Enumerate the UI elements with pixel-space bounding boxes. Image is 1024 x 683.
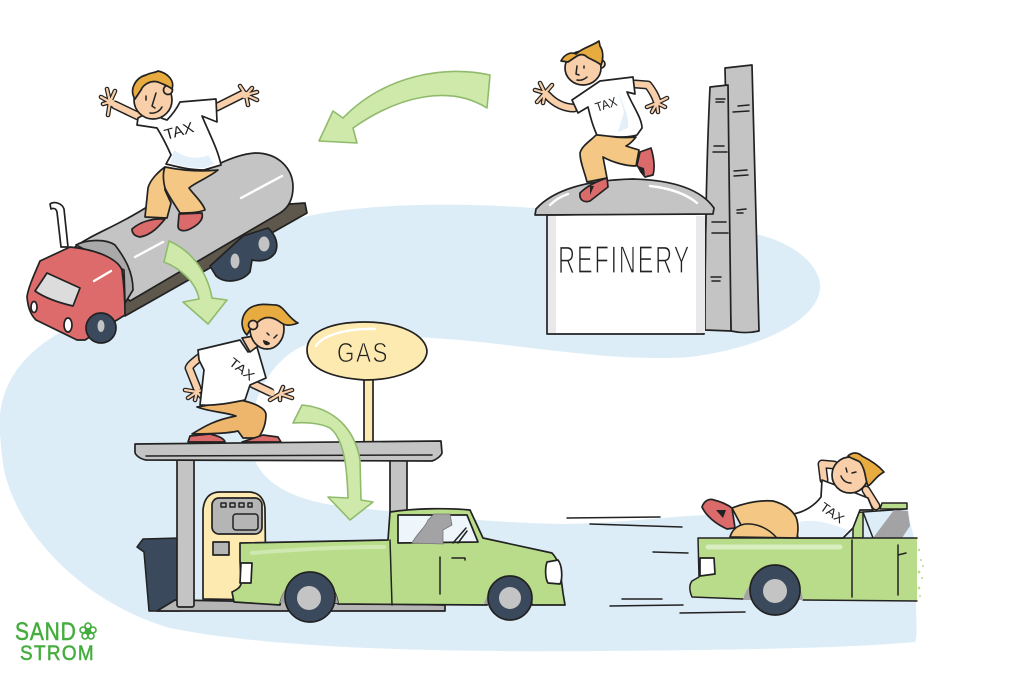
tax label: TAX bbox=[817, 499, 847, 527]
head light bbox=[546, 560, 562, 584]
pants bbox=[192, 400, 266, 438]
shoes bbox=[580, 148, 654, 202]
truck details bbox=[390, 540, 465, 605]
pants bbox=[580, 133, 639, 182]
headlights bbox=[31, 302, 72, 332]
hair bbox=[133, 71, 173, 99]
head bbox=[134, 81, 172, 119]
arrow: refinery to truck bbox=[319, 71, 490, 143]
step 4: driving pickup with tax figure bbox=[567, 453, 924, 615]
refinery label: REFINERY bbox=[558, 238, 691, 281]
dome bbox=[535, 179, 714, 215]
tail light bbox=[240, 563, 252, 583]
shoes bbox=[188, 434, 281, 442]
right post bbox=[390, 454, 407, 524]
shoe bbox=[702, 499, 735, 529]
ear bbox=[597, 60, 605, 68]
building bbox=[547, 213, 706, 334]
shoes bbox=[132, 213, 202, 237]
window bbox=[863, 509, 914, 538]
gas pump bbox=[203, 492, 266, 600]
face bbox=[146, 93, 162, 113]
shirt shade bbox=[170, 150, 214, 168]
truck details bbox=[852, 540, 906, 597]
trash bin bbox=[137, 538, 180, 611]
cab roof and post bbox=[853, 503, 907, 538]
canopy bbox=[135, 441, 442, 461]
driver bbox=[873, 510, 910, 538]
arch shade bbox=[743, 574, 803, 600]
face bbox=[576, 66, 587, 80]
short stack bbox=[705, 85, 731, 331]
tax label: TAX bbox=[226, 355, 258, 384]
pipe bbox=[50, 203, 68, 247]
left post bbox=[177, 455, 194, 607]
logo: Sandstrom: STROM bbox=[20, 642, 95, 665]
step 2: refinery bbox=[535, 41, 759, 334]
logo: Sandstrom: SAND bbox=[15, 617, 77, 645]
head bbox=[832, 457, 868, 493]
shirt shade bbox=[799, 521, 848, 537]
arrow: station to truck bbox=[293, 405, 373, 520]
chassis bbox=[124, 203, 307, 316]
speckled truck edge bbox=[918, 549, 924, 597]
pants bbox=[730, 501, 798, 538]
hair bbox=[561, 41, 603, 65]
gas sign post bbox=[364, 379, 373, 442]
shirt shade bbox=[618, 92, 628, 132]
hair bbox=[242, 304, 298, 335]
gas sign bbox=[307, 322, 427, 380]
tax label: TAX bbox=[162, 119, 196, 144]
ear bbox=[248, 320, 258, 330]
step 3: gas station bbox=[135, 304, 565, 622]
window bbox=[398, 515, 478, 543]
green pickup truck bbox=[232, 509, 565, 622]
arrow: truck to station bbox=[164, 241, 227, 324]
icon: flower bbox=[80, 623, 96, 639]
hair bbox=[848, 453, 884, 486]
speed lines bbox=[567, 517, 745, 613]
truck body bbox=[690, 538, 917, 601]
neck bbox=[242, 336, 258, 352]
tall stack bbox=[725, 65, 759, 332]
wheels bbox=[285, 572, 335, 622]
tank bbox=[75, 153, 293, 301]
shirt bbox=[137, 99, 221, 170]
tank cap bbox=[76, 240, 133, 303]
shirt bbox=[198, 340, 266, 405]
tail light bbox=[700, 558, 715, 576]
cab bbox=[27, 247, 125, 340]
front wheel bbox=[86, 313, 116, 343]
tax figure arms bbox=[101, 86, 257, 116]
face bbox=[841, 468, 856, 483]
tax figure shirt bbox=[793, 480, 873, 538]
tax figure arms bbox=[185, 358, 292, 400]
gas label: GAS bbox=[337, 338, 389, 369]
base slab bbox=[157, 600, 445, 611]
face bbox=[267, 333, 277, 338]
arch shade bbox=[280, 578, 532, 604]
windshield bbox=[35, 273, 80, 306]
head bbox=[565, 51, 601, 85]
driver bbox=[412, 514, 452, 544]
tax label: TAX bbox=[593, 94, 619, 115]
shirt bbox=[572, 77, 642, 137]
background blue road shape bbox=[0, 205, 917, 651]
wheel bbox=[750, 565, 800, 615]
pants bbox=[145, 167, 218, 218]
tank highlights bbox=[135, 176, 282, 257]
logo: Sandstrom bbox=[15, 617, 96, 665]
arms behind head bbox=[822, 464, 876, 506]
building shade bbox=[548, 216, 705, 333]
step 1: tanker truck with tax figure bbox=[27, 71, 307, 343]
head bbox=[250, 309, 284, 349]
rear wheels bbox=[210, 228, 277, 281]
ear bbox=[164, 86, 172, 94]
tax figure arms bbox=[535, 83, 667, 112]
